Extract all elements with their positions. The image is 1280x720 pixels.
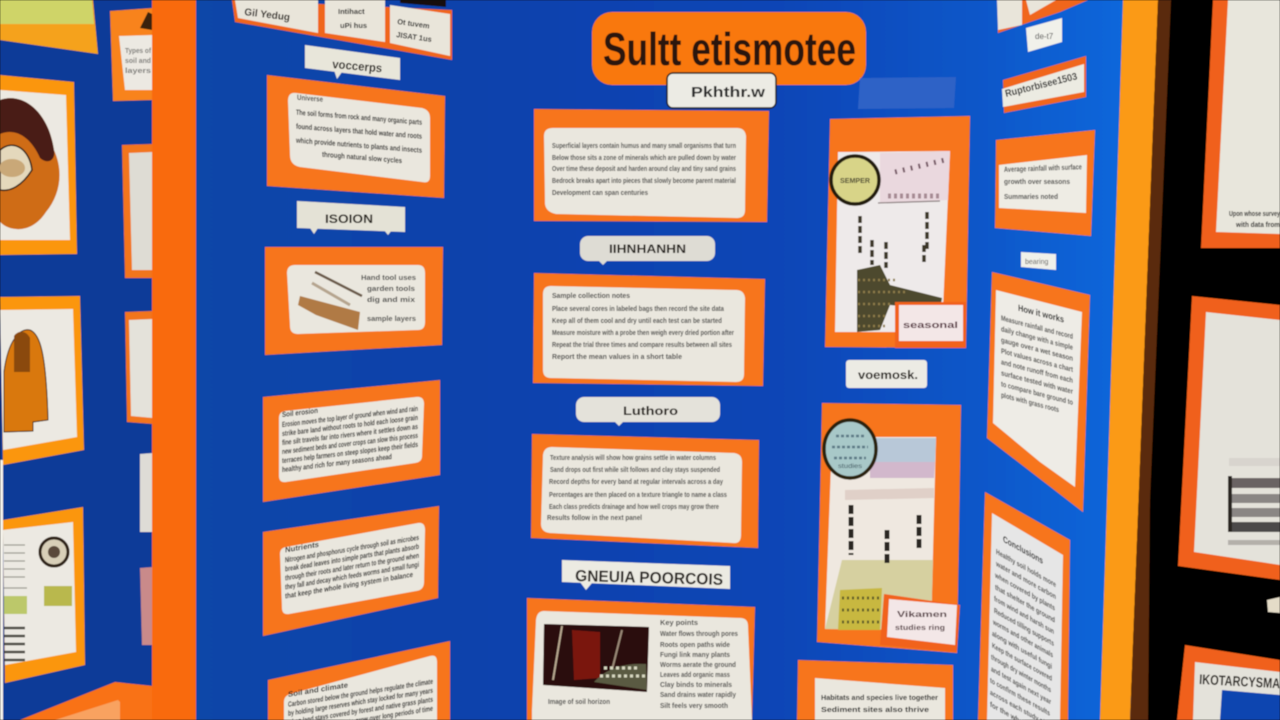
card: right text three: through dry winter months [991, 652, 1051, 695]
clip: small white fastener [1267, 597, 1280, 613]
card: white inset one [129, 152, 153, 270]
top strip: three notes: uPi hus [340, 21, 367, 30]
card: text block three: fine silt travels far into rivers where it settles down as [282, 422, 418, 447]
card: right text three: Healthy soil holds more [996, 547, 1056, 589]
card: intro text [267, 75, 445, 198]
card: right text one: growth over seasons [1004, 177, 1070, 186]
poster: far right top [1201, 0, 1280, 248]
caption: seasonal [903, 320, 958, 330]
label: isoion: ISOION [325, 212, 373, 226]
photo: forest scene [543, 624, 649, 692]
strip: left orange edge [152, 0, 196, 720]
card: center text two: Measure moisture with a probe then weigh every dried portion after [552, 328, 734, 337]
top strip: right notes [997, 0, 1088, 33]
card: center text two: Report the mean values in a short table [552, 352, 682, 361]
card: text block three: strike bare land without roots to hold each loose grain [282, 413, 418, 438]
card: small top: Types of [125, 46, 151, 55]
card: right text three: from wind and harsh sun [994, 594, 1054, 636]
card: tools illustration: dig and mix [367, 295, 416, 304]
card: intro text: which provide nutrients to plants and insects [295, 136, 422, 155]
stamp: badge [831, 156, 879, 204]
card: text block four: Nutrients [285, 540, 319, 555]
card: right text three [978, 492, 1070, 720]
card: center text one: Superficial layers contain humus and many small organisms that turn [552, 141, 736, 150]
card: text block four: break dead leaves into simple parts that plants absorb [285, 542, 419, 574]
card: photo and list: Water flows through pores [660, 629, 738, 638]
title [592, 12, 866, 85]
label: heading three: Luthoro [623, 404, 678, 418]
card: right text three: along with useful fungi [992, 629, 1052, 671]
poster: plant collage bottom [817, 403, 961, 653]
card: small top: layers [125, 66, 151, 75]
card: text block five: by holding large reserves which stay locked for many years [288, 686, 433, 718]
card: photo and list: Silt feels very smooth [660, 701, 728, 710]
card: right text three: Keep the surface covered [992, 641, 1052, 683]
card: small top: soil and [125, 56, 151, 65]
card: center text two: Keep all of them cool and dry until each test can be started [552, 316, 722, 325]
card: right text three: Conclusions [1003, 534, 1043, 567]
label: heading four [562, 560, 730, 590]
card: right text three: and test again next year [991, 664, 1052, 707]
label: voemosk: voemosk. [858, 368, 918, 382]
card: text block three: Soil erosion [282, 406, 318, 419]
card: center text two [533, 273, 765, 386]
card: right text two: surface tested with water [1001, 368, 1073, 396]
top strip: three notes: JISAT 1us [396, 30, 432, 44]
card: photo and list: Clay binds to minerals [660, 680, 732, 689]
card: right text two: and note runoff from each [1001, 357, 1073, 385]
label: small tag: de-t7 [1035, 32, 1054, 41]
card: center text three [531, 434, 759, 548]
card: right text three: that shelter the ground [995, 583, 1055, 625]
card: right text two [987, 272, 1090, 512]
card: text block three: new sediment beds and cover crops can slow this process [282, 431, 418, 456]
label: heading two: IIHNHANHN [609, 242, 686, 256]
top strip: three notes: Intihact [338, 7, 365, 16]
card: intro text: found across layers that hold water and roots [296, 122, 422, 141]
title: Sultt etismotee [603, 23, 856, 75]
top strip: three notes: Gil Yedug [244, 7, 291, 24]
card: right text two: daily change with a simple [1001, 324, 1073, 352]
card: text block three [263, 380, 440, 502]
caption [880, 594, 960, 652]
note: yellow paper [0, 0, 98, 54]
top strip: three notes [232, 0, 452, 60]
card: photo and list: Image of soil horizon [548, 697, 610, 706]
card: right text two: Plot values across a chart [1001, 346, 1073, 374]
caption: Vikamen [897, 610, 947, 619]
card: center text two: Repeat the trial three times and compare results between all sites [552, 340, 732, 349]
card: white strip [140, 453, 153, 532]
card: right text three: Reduced tilling supports [994, 606, 1054, 648]
card: photo and list: Key points [660, 618, 698, 627]
card: bottom center: Habitats and species live together [821, 693, 938, 702]
icon: wooden tool [298, 272, 362, 330]
card: text block four [263, 506, 439, 636]
poster: donut illustration [0, 75, 77, 255]
card: photo and list: Leaves add organic mass [660, 670, 730, 679]
card: center text two: Place several cores in labeled bags then record the site data [552, 304, 725, 313]
card: center text three: Record depths for every band at regular intervals across a day [549, 477, 724, 486]
card: right text three: water and more carbon [995, 559, 1056, 601]
card: text block three: Erosion moves the top layer of ground when wind and rain [282, 404, 418, 429]
card: center text two: Sample collection notes [552, 291, 630, 300]
card: text block four: that keep the whole living system in balance [285, 570, 413, 601]
card: small lower [125, 311, 153, 424]
card: text block three: healthy and rich for many seasons ahead [282, 452, 392, 474]
card: white inset two [129, 319, 153, 418]
label: voemosk [846, 360, 927, 388]
card: right text three: worms and other animals [992, 617, 1053, 660]
tape patch [858, 77, 956, 109]
stamp: badge: studies [838, 464, 862, 470]
card: center text one: Below those sits a zone of minerals which are pulled down by water [552, 153, 736, 162]
poster: far right middle [1178, 296, 1280, 580]
card: intro text: Universe [297, 93, 323, 104]
card: photo and list: Roots open paths wide [660, 640, 730, 649]
card: text block four: through their roots and later return to the ground when [285, 551, 419, 583]
card: center text one: Bedrock breaks apart into pieces that slowly become parent material [552, 176, 736, 185]
card: small top [110, 8, 153, 101]
card: small tall [122, 144, 153, 278]
label: small tag [1026, 18, 1062, 52]
card: right text two: gauge over a wet season [1001, 335, 1073, 363]
card: right text two: plots with grass roots [1001, 390, 1059, 414]
card: tools illustration [265, 247, 443, 355]
caption [895, 302, 966, 348]
card: right text one: Average rainfall with surface [1004, 162, 1082, 174]
card: center text three: Results follow in the next panel [547, 513, 642, 522]
caption: studies ring [895, 623, 945, 632]
card: photo and list: Sand drains water rapidly [660, 690, 737, 699]
poster: diagram sheet [3, 507, 85, 683]
card: text block three: terraces help farmers on steep slopes keep their fields [282, 440, 418, 465]
top strip: three notes: Ot tuvem [397, 17, 430, 31]
panel: left board [0, 0, 153, 720]
card: tools illustration: garden tools [367, 284, 415, 293]
card: center text one [534, 109, 769, 222]
label: tiny tag: bearing [1025, 259, 1048, 266]
card: text block five: Soil and climate [288, 680, 348, 699]
label: heading three [576, 397, 720, 426]
icon: plants [851, 505, 919, 565]
label: tiny tag [1021, 252, 1056, 270]
card: tools illustration: sample layers [367, 314, 416, 323]
card: text block five: Carbon stored below the ground helps regulate the climate [288, 677, 433, 709]
label: subtitle: Pkhthr.w [691, 84, 765, 101]
card: center text three: Each class predicts drainage and how well crops may grow there [549, 502, 719, 511]
card: text block four: they fall and decay which feeds worms and small fungi [285, 560, 419, 592]
label: heading two [580, 236, 715, 265]
card: right text one: Summaries noted [1004, 192, 1058, 201]
card: tools illustration: Hand tool uses [361, 273, 416, 282]
card: center text three: Sand drops out first while silt follows and clay stays suspended [550, 465, 720, 474]
card: center text three: Percentages are then placed on a texture triangle to name a class [549, 490, 727, 499]
card: right text one [995, 130, 1095, 236]
label: voccerps: voccerps [332, 57, 383, 75]
card: right heading: Ruptorbisee1503 [1004, 71, 1079, 100]
card: intro text: through natural slow cycles [322, 150, 402, 165]
panel: main blue board [196, 0, 1131, 720]
strip: brown board edge [1130, 0, 1171, 720]
label: isoion [297, 201, 405, 235]
card: right text two: How it works [1018, 303, 1064, 325]
card: right heading [1002, 56, 1086, 113]
stamp: badge [824, 420, 876, 478]
card: text block five [268, 641, 450, 720]
card: photo and list: Worms aerate the ground [660, 660, 736, 669]
card: photo and list: Fungi link many plants [660, 650, 730, 659]
icon: plants [857, 212, 942, 332]
card: bottom center: Sediment sites also thrive [821, 705, 929, 714]
card: intro text: The soil forms from rock and many organic parts [296, 108, 422, 127]
card: photo and list [527, 598, 755, 720]
label: subtitle [667, 73, 776, 108]
poster: far right bottom [1177, 645, 1280, 720]
base: orange board foot [20, 682, 153, 720]
card: right text two: to compare bare ground to [1001, 379, 1073, 407]
card: center text one: Development can span centuries [552, 188, 648, 197]
card: text block four: Nitrogen and phosphorus cycle through soil as microbes [285, 533, 419, 565]
card: bottom center [797, 660, 953, 720]
label: heading four: GNEUIA POORCOIS [575, 568, 724, 589]
strip: right orange edge [1100, 0, 1158, 720]
stamp: badge: SEMPER [840, 178, 870, 185]
card: right text three: when covered by plants [994, 570, 1055, 613]
table [1228, 458, 1280, 545]
card: right text two: Measure rainfall and record [1001, 313, 1073, 341]
card: center text one: Over time these deposit and harden around clay and tiny sand grains [552, 164, 736, 173]
label: voccerps [305, 45, 400, 80]
card: pink strip [140, 567, 153, 645]
poster: orange coat illustration [0, 296, 84, 465]
card: center text three: Texture analysis will show how grains settle in water columns [550, 453, 716, 462]
poster: plant collage top [825, 116, 970, 348]
